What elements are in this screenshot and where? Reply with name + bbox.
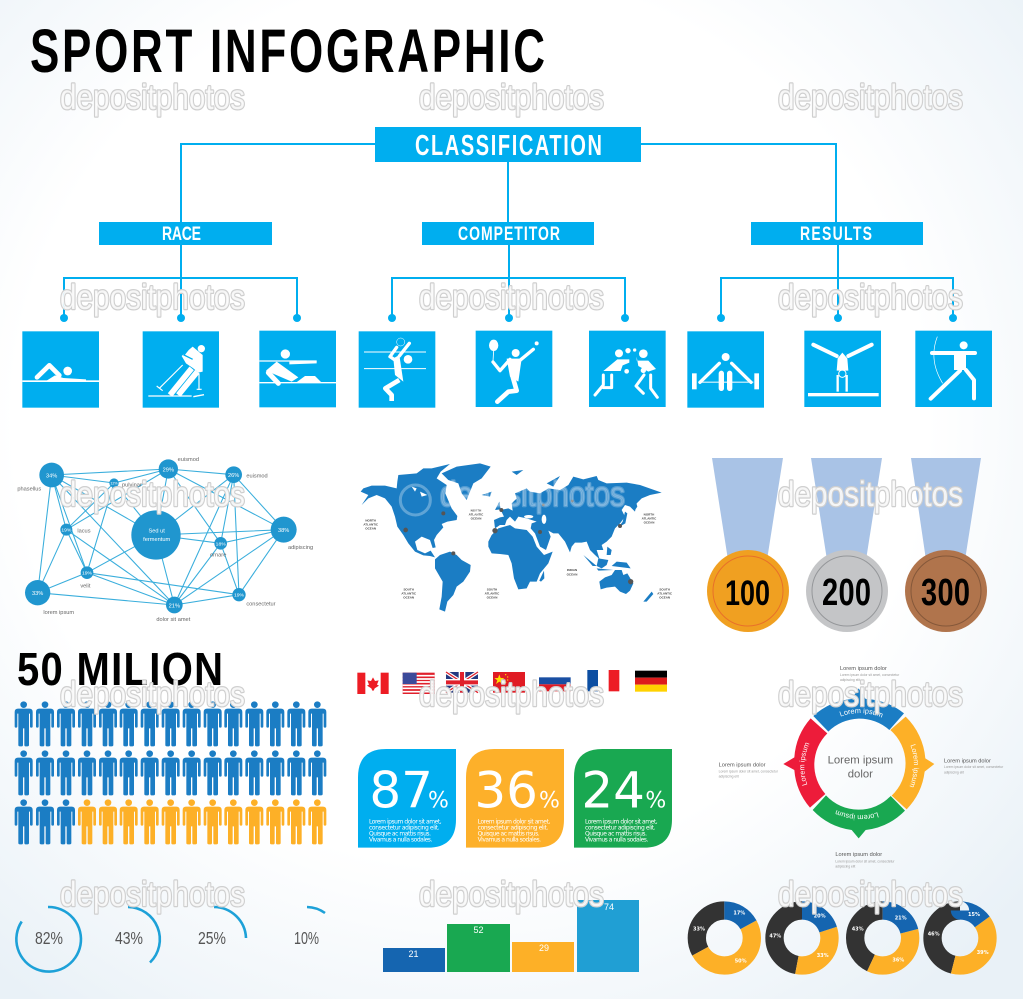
cycle diagram: [718, 666, 1004, 868]
network labels: phasellus: [17, 487, 41, 493]
ocean labels: NORTH: [644, 513, 654, 517]
network values: fermentum: [143, 537, 170, 543]
flag: USA: [403, 673, 435, 694]
callout: top: [840, 666, 900, 682]
network links: [38, 469, 284, 605]
segment: green: Lorem ipsum: [836, 810, 879, 820]
ocean labels: ATLANTIC: [657, 591, 673, 595]
donut 4: 39%: [977, 950, 989, 956]
network values: 29%: [163, 467, 174, 473]
network labels: velit: [80, 583, 91, 589]
heading: 50 milion: 50 MILION: [17, 644, 223, 696]
card: 24%: consectetur adipiscing elit.: [585, 824, 656, 831]
bar: 29: [512, 942, 574, 972]
callout: bottom: Lorem ipsum dolor: [835, 852, 882, 858]
ocean labels: ATLANTIC: [363, 522, 379, 526]
bar: 21: [383, 948, 445, 972]
callout: right: Lorem ipsum dolor sit amet, consectetur: [944, 765, 1004, 769]
callout: bottom: Lorem ipsum dolor sit amet, consectetur: [835, 859, 895, 863]
ocean labels: OCEAN: [403, 596, 414, 600]
watermarks: depositphotos: [778, 674, 963, 714]
centre label: [828, 754, 893, 780]
ocean labels: OCEAN: [644, 521, 654, 525]
donut 2: 47%: [769, 933, 781, 939]
medal: 100: 100: [725, 572, 770, 613]
centre label: dolor: [848, 768, 873, 780]
donut 2: 33%: [817, 953, 829, 959]
donut 4: 15%: [968, 912, 980, 918]
ocean labels: NORTH: [365, 519, 376, 523]
donut 2: 20%: [814, 914, 826, 920]
heading: race: [99, 222, 272, 245]
segment: orange: Lorem ipsum: [910, 744, 920, 788]
donut 3: 21%: [895, 915, 907, 921]
callout: top: Lorem ipsum dolor: [840, 666, 887, 672]
ring: 43%: [115, 907, 160, 962]
watermarks: [60, 77, 963, 914]
donut 3: 36%: [892, 957, 904, 963]
title: SPORT INFOGRAPHIC: [30, 18, 545, 86]
network nodes: [25, 459, 297, 613]
ring: 43%: 43%: [115, 930, 143, 948]
donut charts: [693, 910, 989, 965]
network labels: adipiscing: [288, 545, 313, 551]
medal: 200: 200: [822, 571, 871, 614]
donut 1: 17%: [733, 910, 745, 916]
network chart: [17, 457, 313, 623]
donut 4: [928, 910, 989, 965]
donut 3: 43%: [852, 926, 864, 932]
network values: 12%: [110, 482, 118, 486]
stat cards: [358, 749, 672, 848]
ocean labels: SOUTH: [659, 588, 670, 592]
segment: orange: [890, 716, 934, 810]
inland water: [412, 487, 546, 524]
flags: [357, 670, 667, 694]
heading: classification: [375, 127, 641, 162]
network values: 38%: [278, 528, 289, 534]
ocean labels: ATLANTIC: [401, 591, 417, 595]
watermarks: depositphotos: [60, 77, 245, 117]
watermarks: depositphotos: [419, 277, 604, 317]
card: 24%: Vivamus a nulla sodales.: [585, 836, 648, 843]
network labels: ornare: [210, 552, 226, 558]
ocean labels: ATLANTIC: [642, 517, 657, 521]
callout: left: Lorem ipsum dolor: [719, 763, 766, 769]
bar: 21: 21: [408, 949, 419, 959]
donut 1: 50%: [735, 958, 747, 964]
icon: swimming: [22, 331, 99, 408]
card: 87%: [358, 749, 456, 848]
callout: bottom: adipiscing elit: [835, 864, 855, 868]
watermarks: depositphotos: [440, 474, 625, 514]
icon: gymnastics: [804, 331, 881, 407]
people pictogram: [15, 701, 326, 844]
heading: competitor: COMPETITOR: [458, 223, 560, 245]
donut 3: [852, 910, 910, 965]
card: 36%: [466, 749, 564, 848]
card: 36%: Vivamus a nulla sodales.: [478, 836, 541, 843]
bar: 74: [577, 900, 639, 972]
card: 87%: Quisque ac mattis risus.: [369, 830, 431, 837]
callout: bottom: [835, 852, 895, 868]
ocean labels: SOUTH: [487, 588, 497, 592]
ring: 10%: 10%: [294, 930, 319, 948]
card: 24%: [574, 749, 672, 848]
callout: right: adipiscing elit: [944, 770, 964, 774]
card: 36%: Lorem ipsum dolor sit amet,: [478, 818, 550, 825]
watermarks: depositphotos: [778, 277, 963, 317]
ocean labels: OCEAN: [567, 572, 577, 576]
watermarks: depositphotos: [778, 474, 963, 514]
network labels: consectetur: [246, 601, 276, 607]
card: 87%: consectetur adipiscing elit.: [369, 824, 440, 831]
network values: 21%: [169, 603, 180, 609]
watermarks: depositphotos: [60, 277, 245, 317]
network values: [32, 467, 289, 609]
centre label: Lorem ipsum: [828, 754, 893, 766]
flag: Canada: [357, 673, 389, 694]
donut 2: [769, 910, 829, 965]
ocean labels: ATLANTIC: [469, 512, 484, 516]
donut 1: [693, 910, 752, 965]
network labels: euismod: [178, 457, 199, 463]
tree connectors: [60, 144, 957, 322]
bar: 52: 52: [473, 925, 484, 935]
network values: 19%: [234, 593, 245, 599]
callout: right: [944, 758, 1004, 774]
ring: 25%: [198, 907, 246, 948]
flag: China: [493, 672, 525, 693]
bar: 29: 29: [539, 943, 549, 953]
ocean labels: NORTH: [471, 509, 481, 513]
icon: weightlifting: [687, 331, 764, 408]
watermarks: depositphotos: [778, 77, 963, 117]
watermarks: depositphotos: [419, 674, 604, 714]
network values: 33%: [32, 591, 43, 597]
card: 24%: 24: [581, 761, 645, 819]
heading: classification: CLASSIFICATION: [415, 129, 602, 162]
icon: badminton: [476, 331, 552, 407]
segment: green: [812, 796, 905, 838]
watermarks: depositphotos: [778, 874, 963, 914]
donut 1: 33%: [693, 926, 705, 932]
heading: results: [751, 222, 923, 245]
flag: France: [587, 670, 619, 691]
ocean labels: OCEAN: [487, 596, 497, 600]
icon: skiing: [143, 331, 219, 408]
network values: 34%: [46, 473, 57, 479]
map markers: [403, 500, 633, 584]
ocean labels: INDIAN: [567, 568, 577, 572]
continents: [361, 463, 662, 612]
network values: 26%: [228, 473, 239, 479]
icon: archery: [915, 331, 992, 407]
callout: left: Lorem ipsum dolor sit amet, consectetur: [719, 769, 779, 773]
flag: UK: [446, 672, 478, 693]
ocean labels: OCEAN: [659, 596, 670, 600]
callout: right: Lorem ipsum dolor: [944, 758, 991, 764]
donut 4: 46%: [928, 932, 940, 938]
card: 24%: %: [645, 788, 666, 813]
card: 36%: %: [539, 788, 560, 813]
watermarks: depositphotos: [60, 874, 245, 914]
ring: 10%: [294, 907, 325, 948]
ocean labels: OCEAN: [365, 526, 376, 530]
watermarks: depositphotos: [419, 874, 604, 914]
bar: 52: [447, 924, 510, 972]
callout: left: adipiscing elit: [719, 774, 739, 778]
icon: rowing: [259, 331, 336, 407]
network labels: [17, 457, 313, 623]
progress rings: [16, 907, 325, 972]
flag: Russia: [539, 677, 571, 691]
segment: blue: [813, 688, 904, 732]
card: 87%: Lorem ipsum dolor sit amet,: [369, 818, 442, 825]
card: 36%: 36: [474, 761, 538, 819]
ring: 82%: 82%: [35, 930, 63, 948]
ocean labels: [363, 509, 673, 600]
ocean labels: ATLANTIC: [485, 591, 500, 595]
flag: Germany: [635, 671, 667, 692]
heading: results: RESULTS: [800, 223, 872, 245]
callout: top: adipiscing elit: [840, 678, 860, 682]
ring: 82%: [16, 907, 81, 972]
card: 87%: %: [428, 788, 449, 813]
classification tree: [60, 127, 957, 322]
ocean labels: SOUTH: [403, 588, 414, 592]
ocean labels: OCEAN: [471, 516, 481, 520]
medal: 200: [806, 458, 888, 632]
card: 87%: Vivamus a nulla sodales.: [369, 836, 432, 843]
segment: red: Lorem ipsum: [799, 742, 810, 786]
segment: red: [784, 718, 828, 808]
medals: [707, 458, 987, 632]
segment: blue: Lorem ipsum: [840, 708, 883, 718]
medal: 300: [905, 458, 987, 632]
callout: left: [719, 763, 779, 778]
network labels: pulvinar: [122, 482, 142, 488]
network values: Sed ut: [148, 528, 165, 534]
ring: 25%: 25%: [198, 930, 226, 948]
network labels: lacus: [77, 528, 91, 534]
card: 36%: consectetur adipiscing elit.: [478, 824, 548, 831]
medal: 100: [707, 458, 789, 632]
world map: [361, 463, 673, 612]
network labels: lorem ipsum: [43, 610, 74, 616]
card: 24%: Quisque ac mattis risus.: [585, 830, 647, 837]
network labels: dolor sit amet: [156, 617, 191, 623]
network values: 19%: [82, 571, 93, 577]
watermarks: depositphotos: [60, 674, 245, 714]
watermarks: depositphotos: [60, 474, 245, 514]
network labels: euismod: [246, 474, 268, 480]
icon: boxing: [589, 331, 666, 407]
callout: top: Lorem ipsum dolor sit amet, consectetur: [840, 673, 900, 677]
bar: 74: 74: [604, 902, 614, 912]
bar chart: [383, 900, 639, 972]
medal: 300: 300: [921, 571, 970, 614]
heading: competitor: [422, 222, 594, 245]
network values: 19%: [61, 528, 72, 534]
icon: volleyball: [359, 331, 435, 408]
card: 36%: Quisque ac mattis risus.: [478, 830, 540, 837]
card: 87%: 87: [369, 761, 433, 819]
watermarks: depositphotos: [419, 77, 604, 117]
card: 24%: Lorem ipsum dolor sit amet,: [585, 818, 658, 825]
heading: race: RACE: [162, 223, 201, 245]
network values: 18%: [216, 541, 226, 547]
